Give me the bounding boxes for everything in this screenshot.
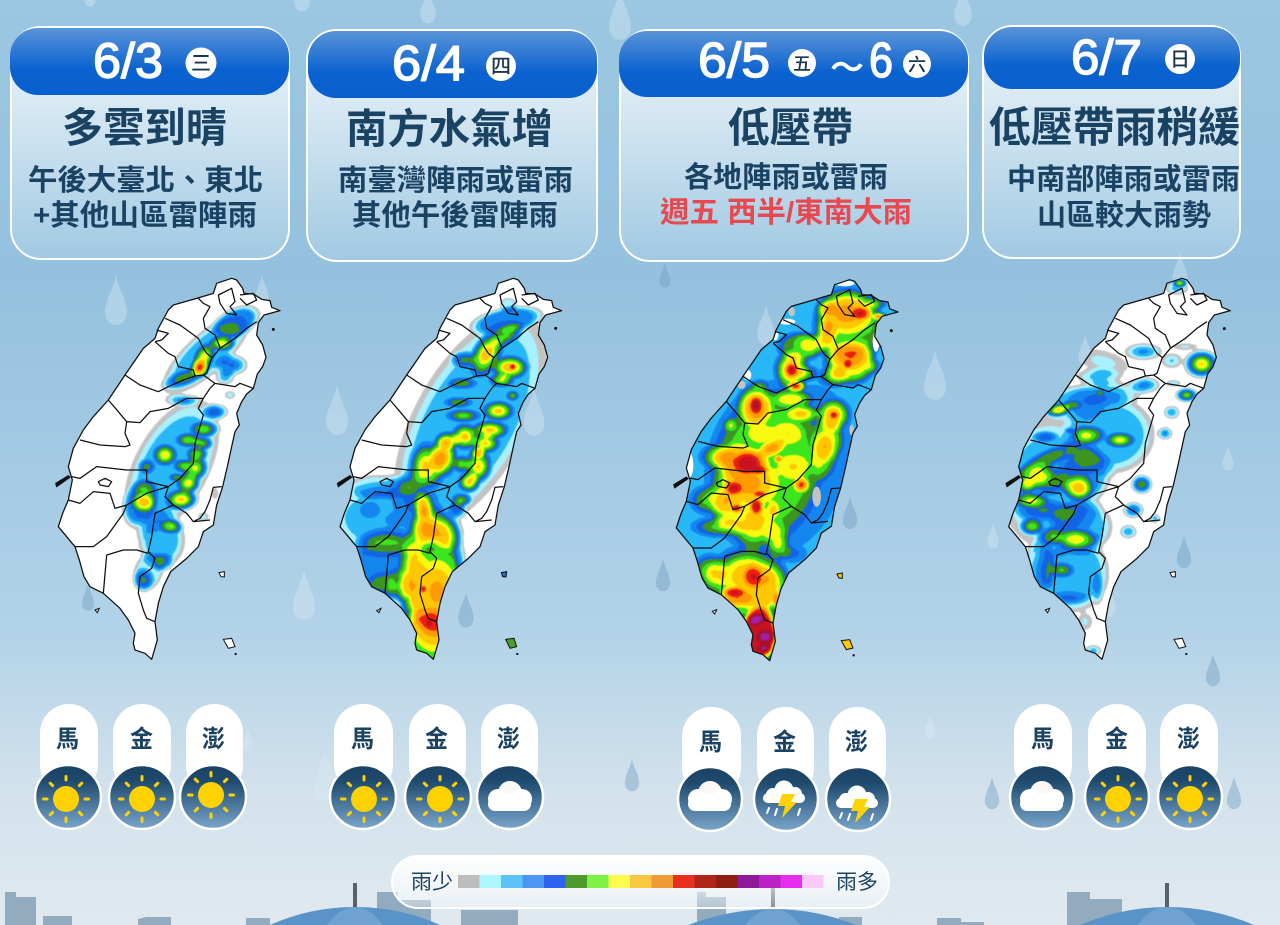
header: 6/4: 四	[491, 56, 511, 78]
outlying islands weather: 6/3	[35, 704, 246, 829]
Matsu sunny	[35, 704, 101, 829]
rainfall map: 6/7	[992, 277, 1230, 659]
description: 午後大臺北、東北	[28, 164, 263, 197]
header: 6/7: 日	[1170, 49, 1190, 71]
header: 6/5 to 6/6: 五	[793, 54, 811, 74]
header: 6/3: 三	[191, 53, 211, 75]
title: 低壓帶	[728, 105, 853, 151]
description	[338, 164, 573, 232]
description: 南臺灣陣雨或雷雨	[338, 164, 573, 197]
header: 6/7: 6/7	[1071, 31, 1142, 85]
description: 中南部陣雨或雷雨	[1007, 163, 1240, 196]
header: 6/5 to 6/6: ～	[831, 52, 863, 85]
Matsu cloudy: 馬	[699, 729, 722, 756]
Kinmen thunderstorm	[754, 707, 818, 831]
Matsu sunny: 馬	[56, 726, 79, 753]
header: 6/5 to 6/6: 六	[908, 55, 926, 75]
title: 低壓帶雨稍緩	[989, 104, 1240, 151]
umbrella 3	[1080, 883, 1254, 925]
Penghu cloudy: 澎	[497, 726, 520, 753]
description: 各地陣雨或雷雨	[684, 161, 888, 194]
dry patches	[684, 280, 879, 507]
panel: 6/7 card	[983, 26, 1240, 258]
Penghu sunny: 澎	[202, 726, 225, 753]
Kinmen thunderstorm: 金	[773, 728, 796, 756]
Matsu cloudy	[678, 707, 742, 831]
outlying islands	[337, 327, 557, 655]
title: 多雲到晴	[62, 105, 227, 151]
panel: 6/4 card	[307, 30, 597, 261]
header: 6/4: 6/4	[392, 37, 465, 91]
header: 6/7	[984, 27, 1240, 89]
header: 6/5 to 6/6: 6/5	[698, 34, 770, 88]
outlying islands	[1006, 328, 1225, 655]
Kinmen sunny: 金	[130, 725, 153, 753]
description	[1007, 163, 1240, 232]
Penghu sunny	[1158, 704, 1222, 829]
outlying islands weather: 6/4	[330, 704, 543, 829]
description: 週五 西半/東南大雨	[660, 196, 912, 229]
Penghu cloudy	[477, 704, 543, 829]
outlying islands	[56, 328, 274, 655]
outlying islands weather: 6/7	[1010, 704, 1222, 829]
Matsu sunny	[330, 704, 396, 829]
outlying islands weather: 6/5 to 6/6	[678, 707, 890, 831]
Kinmen sunny	[109, 704, 175, 829]
Kinmen sunny	[1085, 704, 1149, 829]
rainfall map: 6/4	[336, 278, 562, 660]
Kinmen sunny: 金	[425, 725, 448, 753]
umbrella 2	[688, 888, 856, 925]
legend: rainfall scale: 雨多	[836, 871, 878, 894]
description	[28, 164, 263, 232]
Matsu cloudy	[1010, 704, 1074, 829]
header: 6/3: 6/3	[93, 34, 163, 88]
umbrella 1	[270, 883, 440, 925]
Penghu thunderstorm	[826, 707, 890, 831]
legend: rainfall scale	[392, 856, 889, 908]
description	[660, 161, 912, 229]
Penghu thunderstorm: 澎	[845, 729, 868, 756]
rainfall map: 6/5 to 6/6	[673, 279, 899, 662]
header: 6/5 to 6/6: 6	[869, 34, 893, 88]
header: 6/3	[10, 28, 289, 95]
rainfall map: 6/3	[56, 278, 280, 659]
decorative rain drops	[82, 0, 1241, 809]
description: 山區較大雨勢	[1037, 199, 1211, 232]
description: 其他午後雷陣雨	[352, 199, 558, 232]
Matsu sunny: 馬	[351, 726, 374, 753]
outlying islands	[674, 330, 892, 656]
header: 6/5 to 6/6	[619, 31, 968, 97]
header: 6/4	[308, 31, 597, 98]
Penghu sunny	[180, 704, 246, 829]
title: 南方水氣增	[346, 106, 553, 152]
legend: rainfall scale: 雨少	[411, 871, 453, 894]
Kinmen sunny	[405, 704, 471, 829]
Penghu sunny: 澎	[1177, 726, 1200, 753]
panel: 6/3 card	[10, 27, 289, 259]
Kinmen sunny: 金	[1105, 725, 1128, 753]
description: +其他山區雷陣雨	[33, 199, 257, 232]
Matsu cloudy: 馬	[1031, 726, 1054, 753]
panel: 6/5-6/6 card	[619, 30, 968, 261]
skyline and umbrellas	[5, 883, 1254, 925]
